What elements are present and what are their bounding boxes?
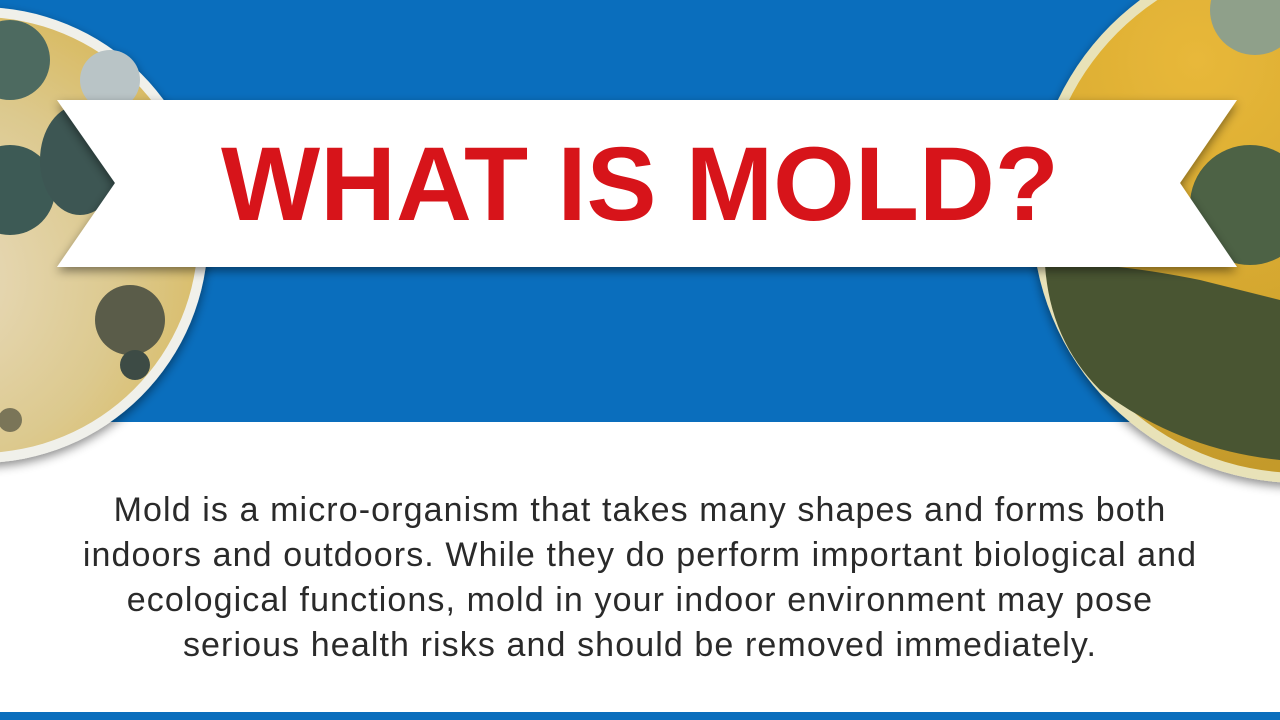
description paragraph: serious health risks and should be removed immediately.: [183, 626, 1097, 664]
ribbon banner: [57, 100, 1237, 267]
description paragraph: ecological functions, mold in your indoor environment may pose: [127, 581, 1153, 619]
description paragraph: Mold is a micro-organism that takes many shapes and forms both: [114, 491, 1166, 529]
description paragraph: [83, 491, 1197, 664]
petri dish right: [1032, 0, 1280, 483]
title: WHAT IS MOLD?: [221, 126, 1059, 243]
description paragraph: indoors and outdoors. While they do perform important biological and: [83, 536, 1197, 574]
petri dish left: [0, 7, 208, 463]
